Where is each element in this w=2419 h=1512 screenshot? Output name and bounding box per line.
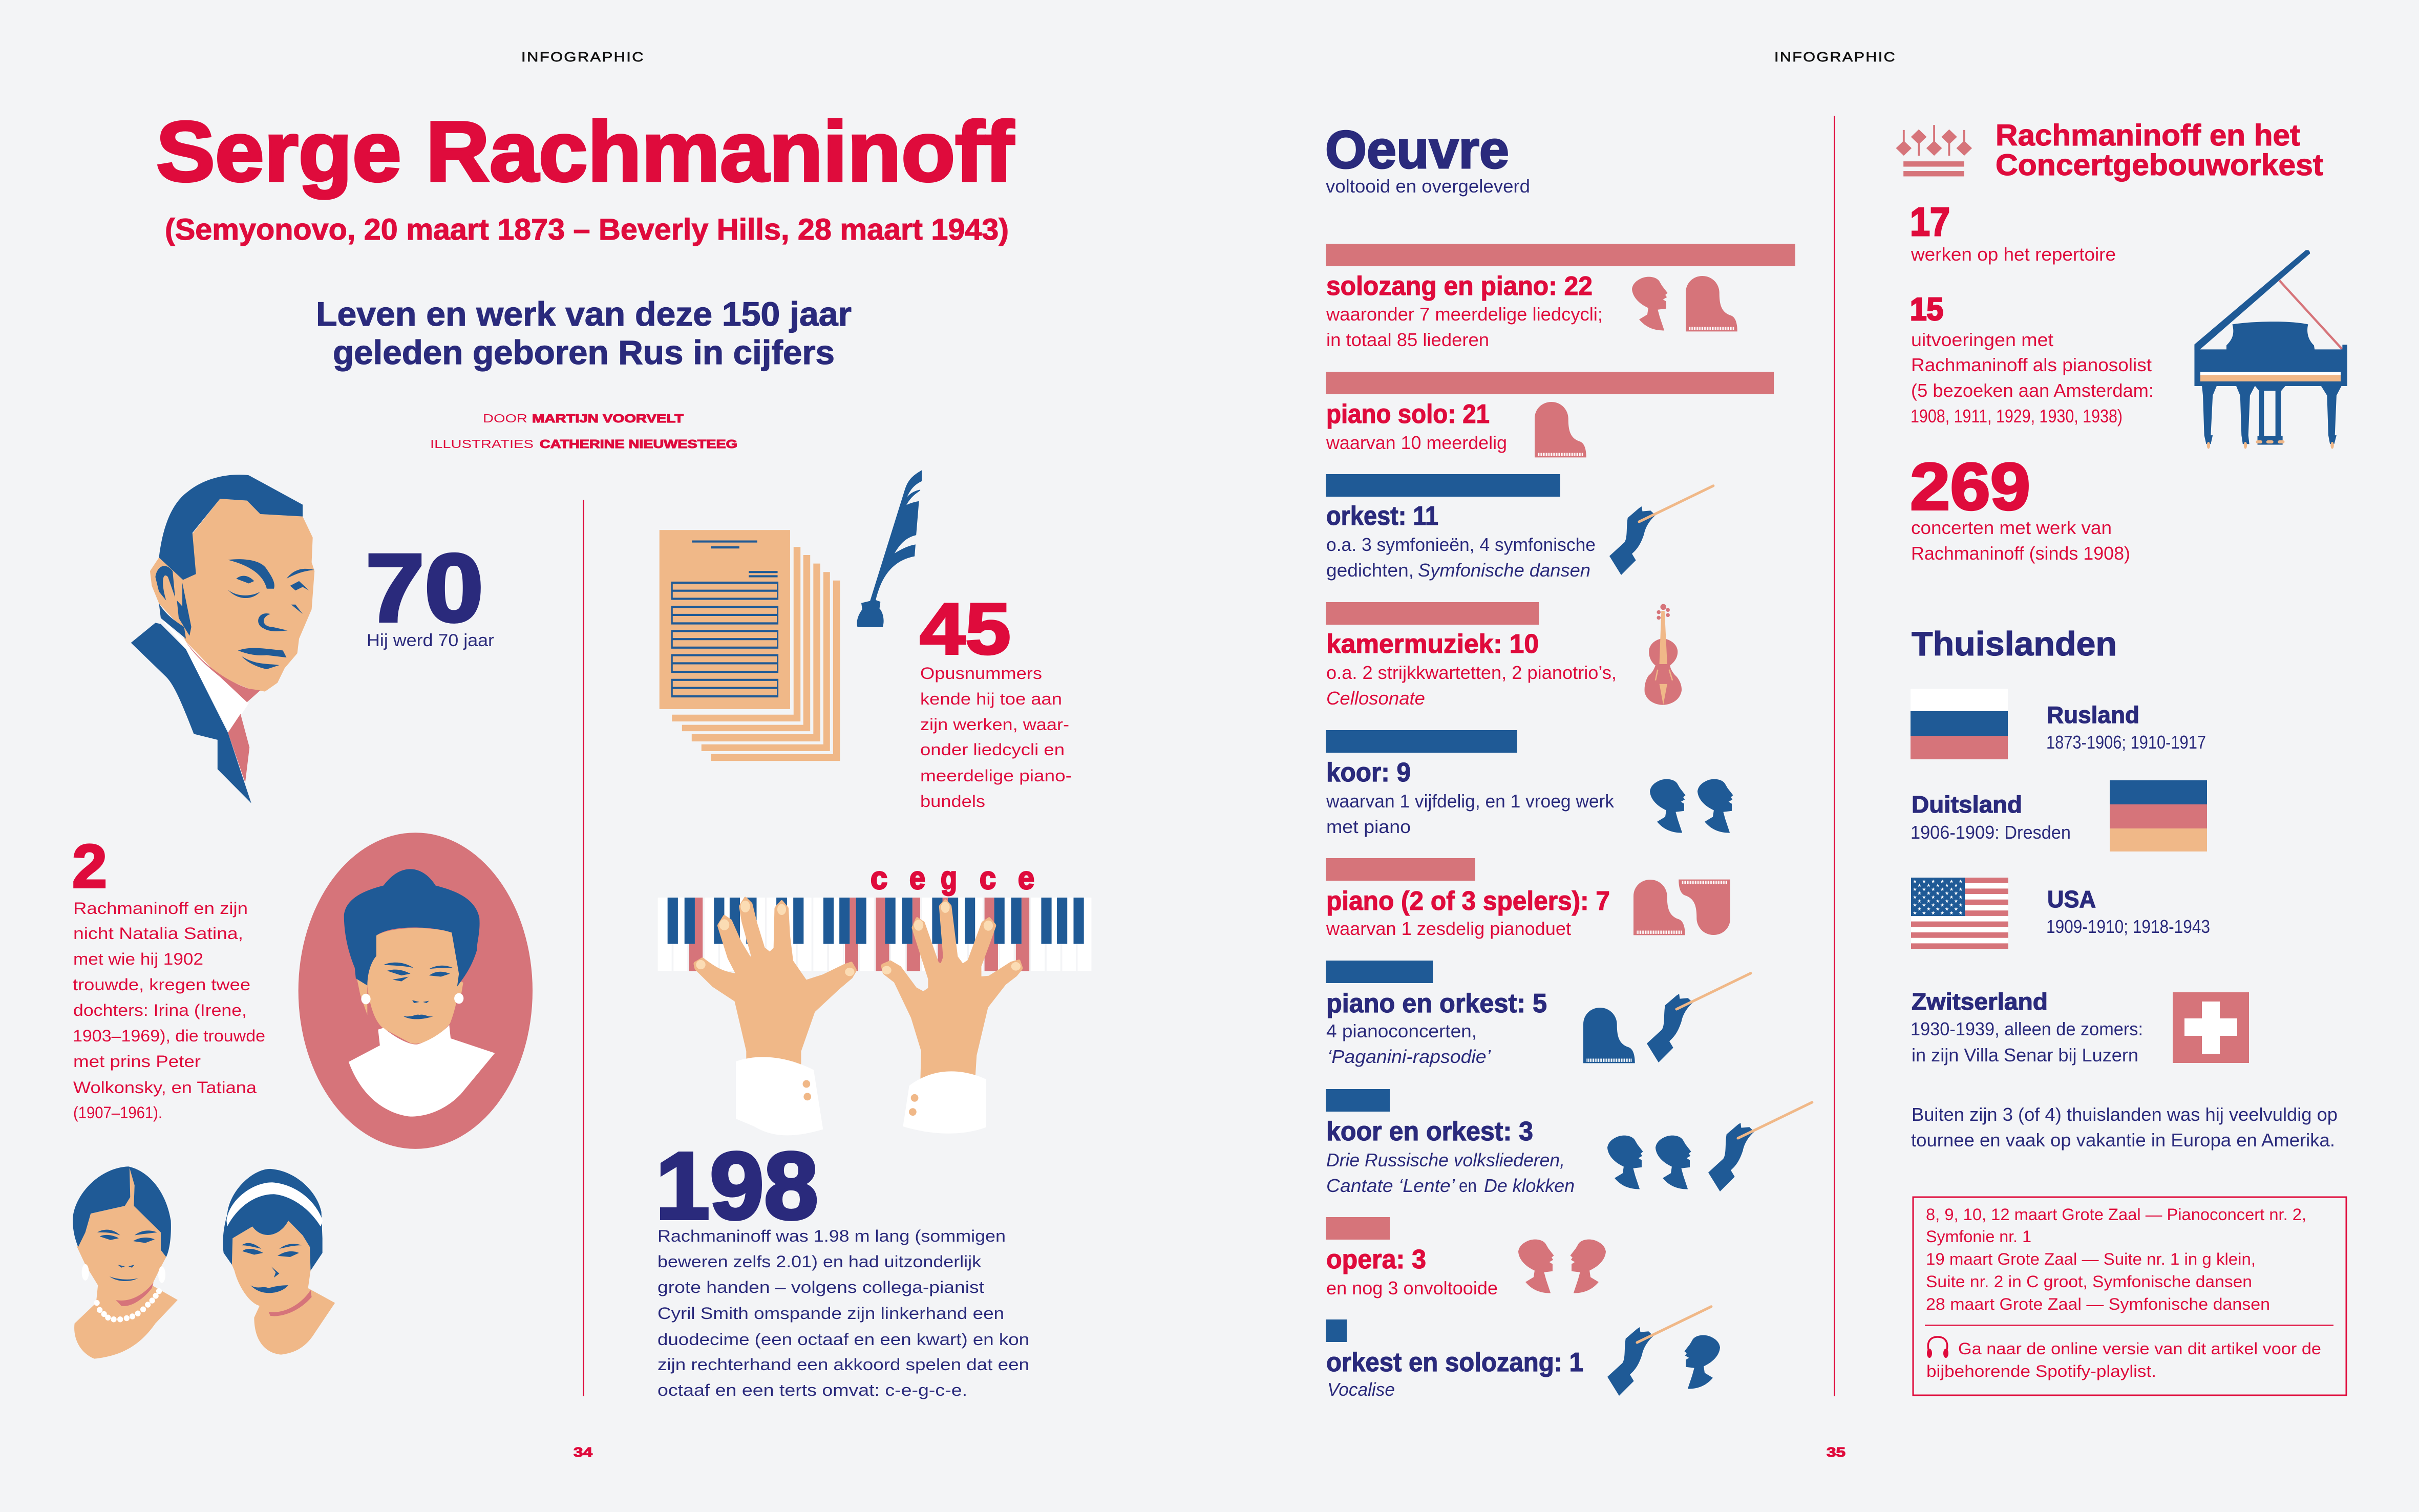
icon: conductor hand <box>1607 1307 1711 1396</box>
country: Rusland: Rusland <box>2047 701 2139 728</box>
icon: singer <box>1607 1136 1643 1189</box>
icon: headphones <box>1927 1337 1948 1358</box>
row: koor en orkest: De klokken <box>1484 1175 1575 1196</box>
intro heading: geleden geboren Rus in cijfers <box>333 333 835 371</box>
row: piano solo <box>1326 372 1774 457</box>
row: kamermuziek: Cellosonate <box>1326 688 1425 709</box>
credits: DOOR <box>483 412 527 425</box>
heading: Concertgebouworkest: Rachmaninoff en het <box>1996 119 2300 152</box>
row: koor en orkest: en <box>1459 1175 1477 1196</box>
callout: concert dates: 28 maart Grote Zaal — Symfonische dansen <box>1926 1295 2270 1313</box>
stat: 17: 17 <box>1910 199 1950 244</box>
icon: grand piano <box>1686 276 1737 331</box>
row: kamermuziek <box>1326 602 1682 709</box>
row: koor en orkest <box>1326 1089 1812 1196</box>
section label: right page: INFOGRAPHIC <box>1774 49 1896 65</box>
portrait: daughter Tatiana <box>223 1169 335 1355</box>
row: piano (2 of 3 spelers): waarvan 1 zesdelig pianoduet <box>1326 918 1571 939</box>
stat: 198 cm: grote handen – volgens collega-pianist <box>657 1278 984 1296</box>
chord letters <box>871 861 1034 896</box>
icon: singer facing left <box>1684 1335 1720 1389</box>
row: koor en orkest: koor en orkest: 3 <box>1326 1117 1533 1146</box>
row: piano en orkest <box>1326 961 1751 1067</box>
row: koor en orkest: Drie Russische volksliederen, <box>1326 1149 1565 1170</box>
row: opera: en nog 3 onvoltooide <box>1326 1277 1498 1298</box>
stat: 17: werken op het repertoire <box>1911 244 2116 265</box>
stat: 45 opus numbers: kende hij toe aan <box>920 690 1062 708</box>
stat: 269: concerten met werk van <box>1911 517 2112 538</box>
stat: 2 daughters: 1903–1969), die trouwde <box>73 1027 265 1045</box>
text block: touring note: tournee en vaak op vakantie in Europa en Amerika. <box>1911 1130 2335 1151</box>
credits <box>430 412 737 451</box>
icon: singer facing right <box>1518 1240 1554 1293</box>
heading: Oeuvre: Oeuvre <box>1325 120 1509 180</box>
row: piano en orkest: 4 pianoconcerten, <box>1326 1020 1477 1041</box>
country: Duitsland: 1906-1909: Dresden <box>1911 822 2071 843</box>
country: Zwitserland: in zijn Villa Senar bij Luzern <box>1912 1045 2138 1066</box>
country: Zwitserland <box>1911 988 2143 1066</box>
page number 34: 34 <box>574 1444 593 1460</box>
icon: singer facing left <box>1570 1240 1606 1293</box>
stat: 45 opus numbers: Opusnummers <box>920 664 1042 683</box>
icon: singer <box>1656 1136 1691 1189</box>
stat: 269: 269 <box>1910 449 2030 524</box>
flag: Russia <box>1911 689 2008 759</box>
icon: singer <box>1650 779 1686 833</box>
heading: Oeuvre <box>1325 120 1530 197</box>
stat: 15: 15 <box>1910 292 1943 327</box>
stat: 198 cm <box>655 1133 1029 1399</box>
icon: grand piano rotated <box>1679 880 1730 935</box>
row: orkest: o.a. 3 symfonieën, 4 symfonische <box>1326 534 1596 555</box>
title: Serge Rachmaninoff <box>156 104 1014 199</box>
stat: 45 opus numbers: bundels <box>920 792 985 811</box>
credits: MARTIJN VOORVELT <box>532 412 684 425</box>
illustration: keyboard with hands <box>658 898 1091 1135</box>
stat: 15: Rachmaninoff als pianosolist <box>1911 354 2152 375</box>
chord letters: g <box>941 861 957 896</box>
flag: Germany <box>2110 780 2207 851</box>
row: piano (2 of 3 spelers): piano (2 of 3 spelers): 7 <box>1326 886 1610 916</box>
callout: concert dates: Symfonie nr. 1 <box>1926 1227 2031 1246</box>
stat: 198 cm: zijn rechterhand een akkoord spelen dat een <box>657 1355 1029 1374</box>
icon: conductor hand <box>1609 486 1713 575</box>
heading: Concertgebouworkest: Concertgebouworkest <box>1996 148 2323 182</box>
row: koor <box>1326 730 1733 837</box>
piano keyboard <box>658 898 1091 971</box>
row: orkest en solozang: Vocalise <box>1327 1379 1395 1400</box>
chord letters: e <box>1018 861 1034 896</box>
country: Zwitserland: Zwitserland <box>1912 988 2048 1015</box>
stat: 198 cm: 198 <box>655 1133 818 1239</box>
row: opera: opera: 3 <box>1326 1245 1426 1274</box>
row: kamermuziek: o.a. 2 strijkkwartetten, 2 pianotrio’s, <box>1326 662 1617 683</box>
row: koor: met piano <box>1326 816 1411 837</box>
stat: 198 cm: beweren zelfs 2.01) en had uitzonderlijk <box>657 1252 982 1271</box>
chord letters: c <box>871 861 887 896</box>
callout: concert dates: bijbehorende Spotify-playlist. <box>1926 1362 2156 1380</box>
stat: 2 daughters: met prins Peter <box>73 1052 201 1071</box>
row: kamermuziek: kamermuziek: 10 <box>1326 629 1539 659</box>
row: piano en orkest: ‘Paganini-rapsodie’ <box>1327 1046 1491 1067</box>
subtitle: dates: (Semyonovo, 20 maart 1873 – Beverly Hills, 28 maart 1943) <box>165 213 1009 246</box>
stat: 2 daughters: trouwde, kregen twee <box>73 975 250 994</box>
stat: 198 cm: Rachmaninoff was 1.98 m lang (sommigen <box>657 1227 1006 1245</box>
row: koor: waarvan 1 vijfdelig, en 1 vroeg werk <box>1326 791 1615 812</box>
stat: 198 cm: octaaf en een terts omvat: c-e-g-c-e. <box>657 1381 967 1399</box>
section label: left page: INFOGRAPHIC <box>521 49 645 65</box>
callout: concert dates: Ga naar de online versie van dit artikel voor de <box>1958 1339 2321 1358</box>
stat: 17 <box>1910 199 2116 265</box>
row: orkest en solozang: orkest en solozang: 1 <box>1326 1348 1583 1377</box>
stat: 70 years: Hij werd 70 jaar <box>367 631 494 650</box>
text block: touring note: Buiten zijn 3 (of 4) thuislanden was hij veelvuldig op <box>1912 1104 2338 1125</box>
callout: concert dates: Suite nr. 2 in C groot, Symfonische dansen <box>1926 1272 2252 1291</box>
heading: Oeuvre: voltooid en overgeleverd <box>1326 176 1530 197</box>
row: piano en orkest: piano en orkest: 5 <box>1326 989 1547 1018</box>
country: USA: USA <box>2047 886 2096 912</box>
icon: cello <box>1645 604 1682 705</box>
row: koor: koor: 9 <box>1326 758 1411 787</box>
stat: 15: uitvoeringen met <box>1911 329 2053 350</box>
row: orkest: gedichten, <box>1326 560 1414 581</box>
icon: Concertgebouw crown <box>1896 125 1972 176</box>
row: piano solo: piano solo: 21 <box>1326 399 1490 429</box>
illustration: grand piano side view <box>2194 250 2347 449</box>
portrait: Rachmaninoff <box>131 475 314 803</box>
text block: touring note <box>1911 1104 2338 1151</box>
row: orkest: orkest: 11 <box>1326 501 1438 531</box>
country: USA: 1909-1910; 1918-1943 <box>2046 916 2210 937</box>
stat: 2 daughters: nicht Natalia Satina, <box>73 924 243 943</box>
callout: concert dates: 19 maart Grote Zaal — Suite nr. 1 in g klein, <box>1926 1250 2256 1268</box>
heading: Concertgebouworkest <box>1996 119 2323 182</box>
flag: USA <box>1911 878 2008 949</box>
heading: Thuislanden: Thuislanden <box>1912 625 2117 663</box>
stat: 198 cm: duodecime (een octaaf en een kwart) en kon <box>657 1330 1029 1349</box>
row: orkest en solozang <box>1326 1307 1720 1400</box>
stat: 45 opus numbers <box>920 588 1072 811</box>
stat: 15 <box>1910 292 2154 427</box>
credits: CATHERINE NIEUWESTEEG <box>540 437 737 451</box>
icon: singer <box>1697 779 1733 833</box>
icon: grand piano <box>1633 880 1685 935</box>
row: solozang en piano: in totaal 85 liederen <box>1326 329 1489 350</box>
stat: 45 opus numbers: 45 <box>920 588 1011 670</box>
country: Rusland <box>2046 701 2206 753</box>
icon: conductor hand <box>1647 973 1751 1062</box>
stat: 269: Rachmaninoff (sinds 1908) <box>1911 543 2130 564</box>
row: koor en orkest: Cantate ‘Lente’ <box>1326 1175 1455 1196</box>
country: Zwitserland: 1930-1939, alleen de zomers: <box>1911 1018 2143 1039</box>
stat: 45 opus numbers: zijn werken, waar- <box>920 715 1069 734</box>
stat: 2 daughters: met wie hij 1902 <box>73 950 203 968</box>
stat: 15: 1908, 1911, 1929, 1930, 1938) <box>1911 406 2123 427</box>
icon: sheet music stack <box>660 530 840 761</box>
callout: concert dates: 8, 9, 10, 12 maart Grote Zaal — Pianoconcert nr. 2, <box>1926 1205 2306 1224</box>
stat: 2 daughters: Rachmaninoff en zijn <box>73 899 248 918</box>
icon: grand piano <box>1535 402 1586 457</box>
icon: grand piano <box>1583 1008 1635 1063</box>
stat: 2 daughters <box>72 832 265 1122</box>
stat: 2 daughters: dochters: Irina (Irene, <box>73 1001 247 1019</box>
country: Duitsland <box>1911 791 2071 843</box>
credits: ILLUSTRATIES <box>430 437 534 451</box>
stat: 2 daughters: 2 <box>72 832 107 901</box>
flag: Switzerland <box>2173 992 2249 1063</box>
row: piano (2 of 3 spelers) <box>1326 858 1730 939</box>
row: piano solo: waarvan 10 meerdelig <box>1326 432 1507 453</box>
right hand <box>882 902 1021 1134</box>
country: Rusland: 1873-1906; 1910-1917 <box>2046 732 2206 753</box>
row: solozang en piano: solozang en piano: 22 <box>1326 271 1593 301</box>
stat: 70 years: 70 <box>366 534 483 642</box>
country: USA <box>2046 886 2210 937</box>
stat: 45 opus numbers: onder liedcycli en <box>920 740 1065 759</box>
row: solozang en piano <box>1326 244 1795 350</box>
portrait: daughter Irina <box>73 1166 178 1359</box>
stat: 2 daughters: (1907–1961). <box>73 1103 162 1122</box>
stat: 45 opus numbers: meerdelige piano- <box>920 766 1072 785</box>
row: orkest: Symfonische dansen <box>1418 560 1590 581</box>
stat: 15: (5 bezoeken aan Amsterdam: <box>1911 380 2154 401</box>
icon: singer <box>1632 277 1668 331</box>
row: orkest <box>1326 474 1713 581</box>
row: solozang en piano: waaronder 7 meerdelige liedcycli; <box>1326 304 1603 325</box>
row: opera <box>1326 1217 1606 1298</box>
icon: conductor hand <box>1708 1102 1812 1191</box>
chord letters: c <box>980 861 996 896</box>
country: Duitsland: Duitsland <box>1912 791 2022 818</box>
left hand <box>695 899 855 1135</box>
chord letters: e <box>909 861 925 896</box>
stat: 2 daughters: Wolkonsky, en Tatiana <box>73 1078 257 1097</box>
stat: 269 <box>1910 449 2130 564</box>
callout: concert dates <box>1913 1197 2346 1395</box>
intro heading <box>316 295 852 371</box>
icon: quill and ink pot <box>857 470 922 627</box>
portrait: Natalia Satina <box>299 833 533 1149</box>
page number 35: 35 <box>1827 1444 1845 1460</box>
stat: 198 cm: Cyril Smith omspande zijn linkerhand een <box>657 1304 1004 1323</box>
intro heading: Leven en werk van deze 150 jaar <box>316 295 852 333</box>
